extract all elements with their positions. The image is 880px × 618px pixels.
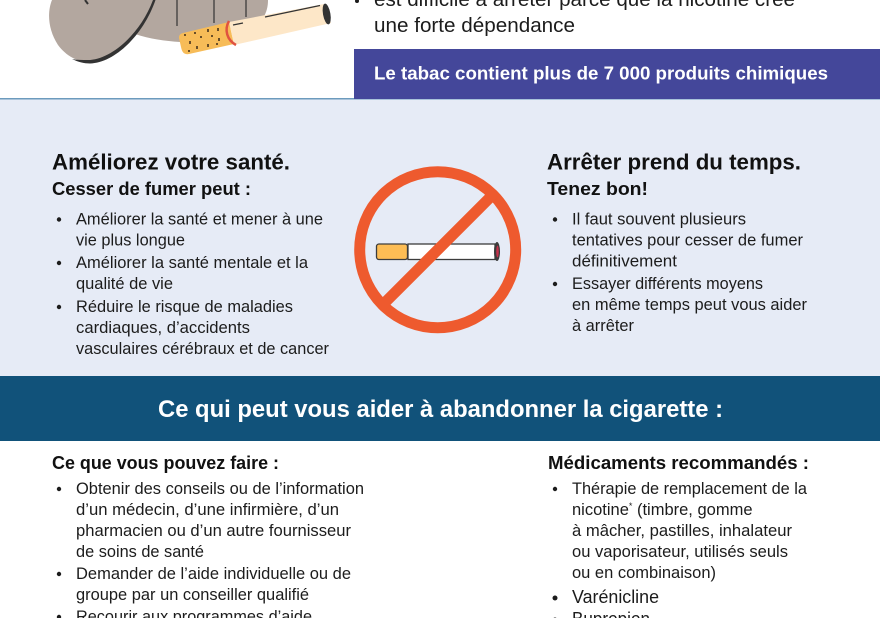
- text block: what you can do: [52, 453, 364, 618]
- text block: improve your health: cardiaques, d’accidents: [76, 319, 250, 337]
- text block: quitting takes time: Il faut souvent plusieurs: [572, 210, 746, 228]
- text block: improve your health: vie plus longue: [76, 232, 185, 250]
- text block: recommended medication: [548, 453, 809, 618]
- text block: recommended medication: Varénicline: [572, 587, 659, 607]
- text block: improve your health: Réduire le risque de maladies: [76, 298, 293, 316]
- text block: recommended medication: *: [629, 501, 633, 511]
- text block: recommended medication: Médicaments recommandés :: [548, 453, 809, 473]
- heading band: what can help: [0, 376, 880, 441]
- callout: chemicals banner: [354, 49, 880, 99]
- heading band: what can help: Ce qui peut vous aider à abandonner la cigarette :: [158, 396, 723, 423]
- text block: what you can do: Demander de l’aide individuelle ou de: [76, 565, 351, 583]
- text block: top bullet: une forte dépendance: [374, 14, 575, 37]
- text block: improve your health: Cesser de fumer peut :: [52, 179, 251, 199]
- text block: improve your health: [52, 150, 329, 358]
- text block: recommended medication: à mâcher, pastilles, inhalateur: [572, 522, 792, 540]
- text block: quitting takes time: définitivement: [572, 252, 677, 270]
- text block: recommended medication: ou vaporisateur, utilisés seuls: [572, 543, 788, 561]
- text block: improve your health: Améliorer la santé et mener à une: [76, 210, 323, 228]
- text block: improve your health: vasculaires cérébraux et de cancer: [76, 340, 329, 358]
- text block: what you can do: groupe par un conseiller qualifié: [76, 586, 309, 604]
- text block: quitting takes time: à arrêter: [572, 317, 635, 335]
- panel: light blue health section: [0, 99, 880, 376]
- text block: quitting takes time: Tenez bon!: [547, 179, 648, 199]
- text block: quitting takes time: Arrêter prend du temps.: [547, 150, 801, 174]
- icon: no smoking sign: [360, 172, 516, 328]
- text block: quitting takes time: en même temps peut vous aider: [572, 296, 807, 314]
- text block: recommended medication: nicotine: [572, 501, 629, 519]
- text block: what you can do: Obtenir des conseils ou de l’information: [76, 480, 364, 498]
- text block: improve your health: Améliorez votre santé.: [52, 150, 290, 174]
- text block: what you can do: Ce que vous pouvez faire :: [52, 453, 279, 473]
- text block: improve your health: Améliorer la santé mentale et la: [76, 254, 309, 272]
- text block: quitting takes time: tentatives pour cesser de fumer: [572, 232, 803, 250]
- text block: recommended medication: (timbre, gomme: [632, 501, 752, 519]
- text block: recommended medication: ou en combinaison): [572, 564, 716, 582]
- text block: recommended medication: Thérapie de remplacement de la: [572, 480, 808, 498]
- callout: chemicals banner: Le tabac contient plus de 7 000 produits chimiques: [374, 64, 828, 84]
- divider line: [0, 98, 880, 100]
- text block: improve your health: qualité de vie: [76, 275, 173, 293]
- icon: hand holding cigarette: [49, 0, 332, 64]
- text block: quitting takes time: [547, 150, 807, 335]
- text block: what you can do: de soins de santé: [76, 543, 204, 561]
- text block: top bullet: [355, 0, 795, 37]
- text block: quitting takes time: Essayer différents moyens: [572, 275, 763, 293]
- text block: what you can do: d’un médecin, d’une infirmière, d’un: [76, 501, 339, 519]
- text block: what you can do: pharmacien ou d’un autre fournisseur: [76, 522, 351, 540]
